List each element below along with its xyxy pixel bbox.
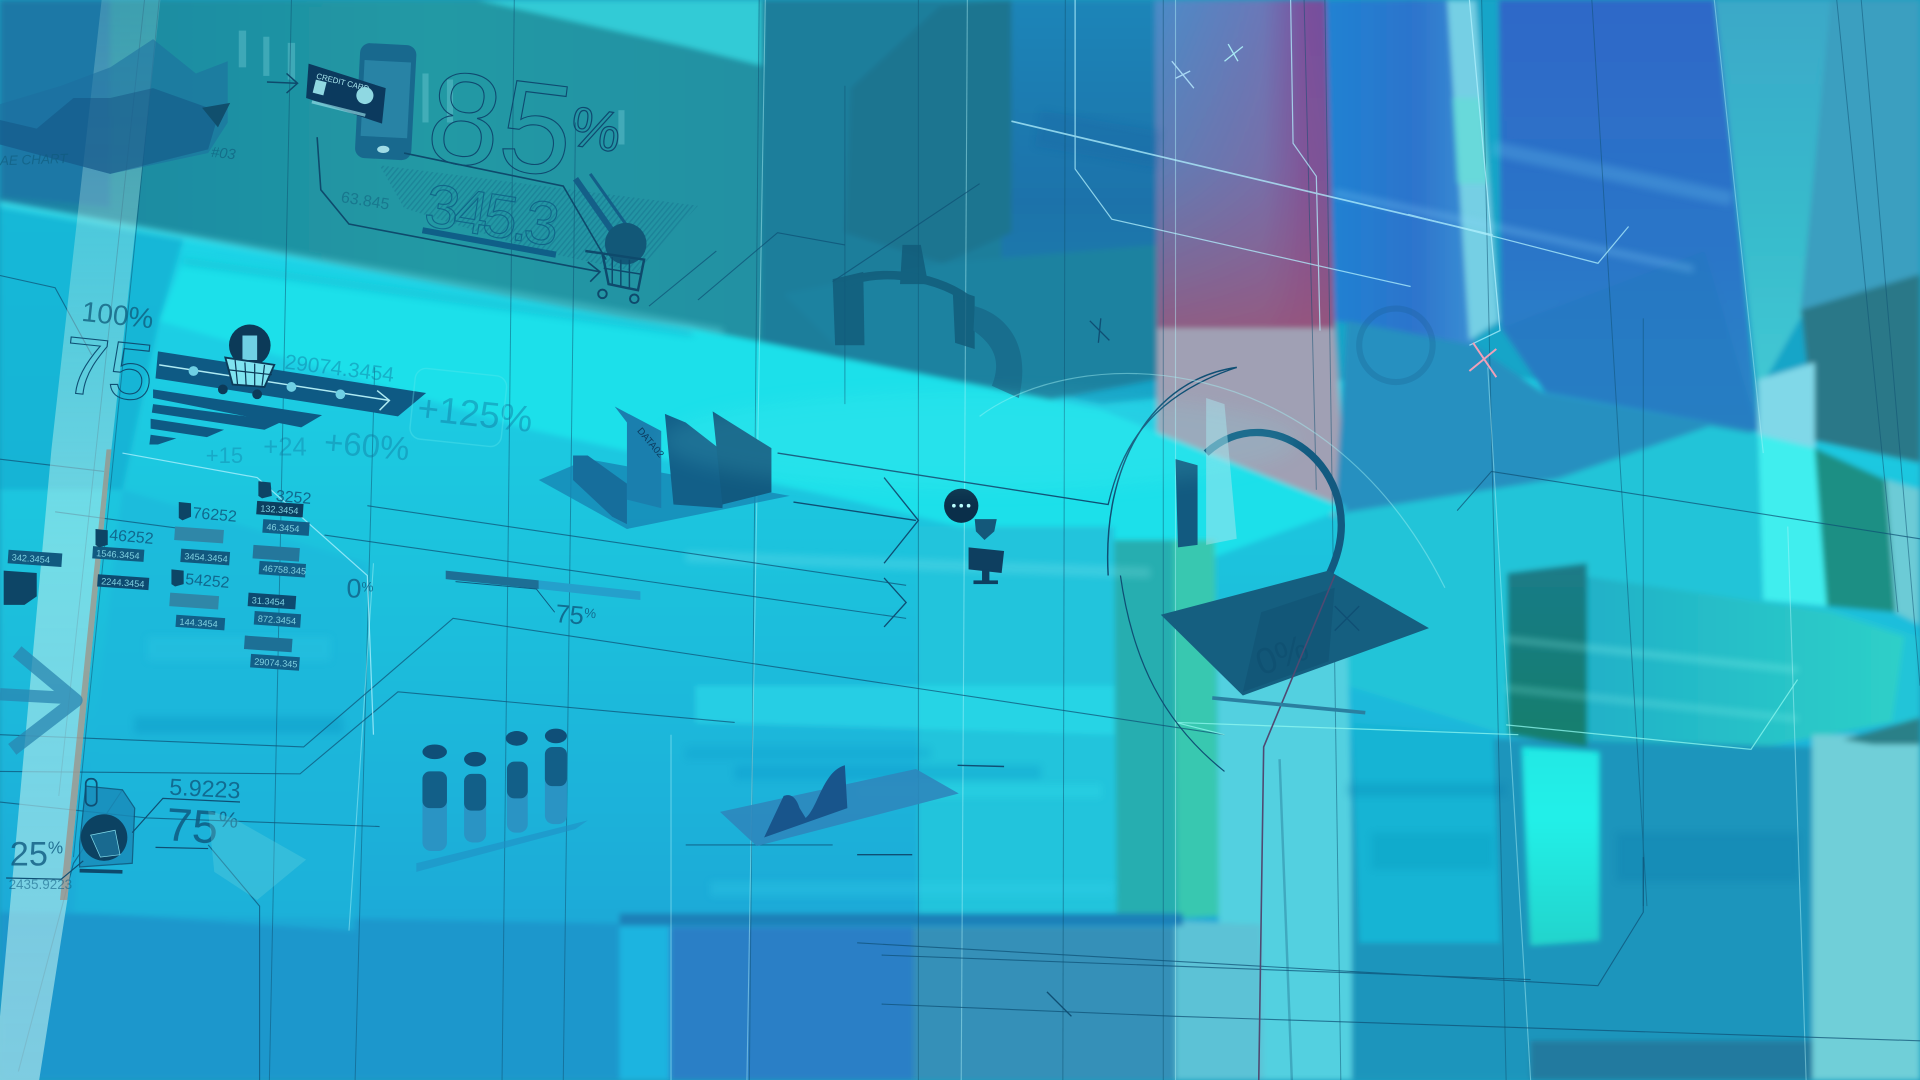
cylinder 2 [464, 752, 486, 842]
funnel chart [149, 351, 426, 444]
right pale block [1758, 362, 1815, 448]
blue band [1326, 0, 1474, 345]
dark blue band [1499, 0, 1758, 431]
stat: 85%: % [566, 94, 626, 164]
right slab [1843, 718, 1920, 744]
data list: headings [109, 488, 312, 592]
red glow [1155, 0, 1335, 331]
tag column 1: 342.3454 [11, 552, 50, 565]
data list: tags: 2244.3454 [101, 576, 145, 589]
right lower plane [1352, 735, 1812, 1080]
crosses [1047, 44, 1496, 1016]
bright central shelf [159, 255, 1347, 576]
cylinder chart [416, 729, 588, 872]
data list: headings: 76252 [192, 505, 238, 526]
centre dark box [845, 0, 1011, 263]
bottom middle blue [670, 927, 913, 1080]
label: chart caption: #03 [210, 145, 237, 163]
gauge: dark slab [1161, 571, 1429, 696]
stat: 0%: % [362, 579, 374, 594]
tag column 2 [174, 527, 224, 543]
dark green block [1507, 563, 1587, 747]
funnel labels: +24 [263, 434, 307, 462]
funnel labels: 29074.3454 [283, 351, 395, 387]
3D bar chart [539, 407, 790, 529]
bottom dark band [1531, 1041, 1812, 1080]
left lower shade [73, 490, 367, 931]
green column [1114, 540, 1178, 918]
pie stats [6, 774, 241, 892]
cylinder 4 [545, 729, 567, 824]
area chart: top left [0, 39, 230, 174]
funnel labels: +15 [206, 443, 243, 468]
bottom middle grey [913, 927, 1176, 1080]
cyan mid column [1352, 722, 1500, 943]
connector line [404, 153, 606, 260]
icon: phone [355, 43, 417, 161]
data list: tags: 872.3454 [257, 614, 296, 626]
icon: cart on funnel [218, 324, 274, 399]
data list: tags: 3454.3454 [184, 551, 228, 564]
gauge: dark slab: 0% [1250, 627, 1314, 683]
progress bar with 75% [446, 571, 640, 632]
bottom left cyan strip [620, 918, 671, 1080]
lower right column [1812, 735, 1920, 1080]
bars [573, 456, 627, 524]
dark blue lower step [1501, 251, 1758, 431]
light vertical lines [349, 0, 1806, 1080]
teal block panel [1580, 576, 1904, 784]
top right ring icon [1359, 309, 1433, 382]
cylinder 1 [422, 744, 447, 851]
connector arrow to cart [317, 137, 600, 282]
data list: headings: 3252 [275, 488, 312, 508]
left strip brown edge [60, 449, 111, 900]
icon: pie document [80, 779, 135, 872]
base [539, 459, 790, 529]
light frame lines: top right [122, 0, 1798, 749]
bright top plane [478, 0, 940, 88]
stat: 100%: 100% [80, 296, 155, 334]
funnel labels: +125% [415, 387, 535, 440]
left pale strip [0, 0, 160, 1080]
cylinder 3 [506, 731, 528, 833]
funnel labels [206, 351, 535, 468]
data list: tags: 144.3454 [179, 617, 218, 629]
pale band glow [1452, 98, 1489, 184]
stat: 75: 75 [59, 320, 158, 419]
gauge: connector lines [1212, 576, 1365, 1080]
3D bar chart: DATA02 [634, 426, 666, 460]
middle teal column [918, 527, 1117, 918]
badge ring [409, 367, 508, 448]
icon: monitor [969, 547, 1004, 584]
pie stats: 2435.9223 [9, 877, 72, 892]
label: chart caption [0, 145, 237, 168]
data list: tags: 46.3454 [266, 522, 300, 534]
pale teal band [1714, 0, 1864, 392]
pie stats: 5.9223 [169, 774, 241, 803]
centre right plane [1002, 0, 1157, 404]
bright teal block [1522, 747, 1599, 945]
data list: headings: 46252 [109, 527, 154, 548]
icon: credit card: CREDIT CARD [315, 72, 370, 93]
stat: 0%: 0 [347, 574, 362, 604]
stat: 85%: 85 [420, 43, 581, 205]
shelf plane [784, 245, 1157, 404]
blue glow under bands [1335, 321, 1758, 514]
muted purple band [1155, 0, 1335, 331]
icon: credit card [306, 64, 386, 124]
left dark plane [0, 0, 110, 208]
progress bar with 75%: 75 [554, 600, 585, 631]
pie stats: 75 [165, 798, 220, 854]
data list: tags: 46758.345 [262, 563, 306, 576]
area chart back layer [0, 39, 228, 174]
arrow: to credit card [267, 73, 298, 93]
icon: coin in cart [576, 174, 647, 303]
icon: headset shape [833, 245, 1022, 398]
pie stats: 25 [10, 836, 48, 874]
bar code strip: top background [239, 31, 624, 144]
right dark block [1801, 274, 1920, 463]
data list: tags: 29074.345 [254, 657, 298, 670]
bottom left blue [0, 912, 671, 1080]
pale lower column [1176, 921, 1264, 1080]
green block [1815, 448, 1896, 612]
pale column [1217, 612, 1357, 1080]
bright panel band [696, 686, 1114, 735]
horizontal streak texture [0, 110, 1800, 896]
data list: document icons [4, 481, 272, 605]
data list: tags [8, 501, 310, 671]
data list: headings: 54252 [185, 571, 230, 592]
underline [422, 230, 556, 255]
progress bar with 75%: % [584, 605, 597, 621]
pie stats: % [218, 807, 239, 833]
soft glow overlay [661, 392, 1298, 490]
far right pale [1886, 480, 1920, 624]
centre dark plane [762, 0, 1022, 404]
upper teal plane [0, 0, 967, 416]
pale band [1447, 0, 1499, 340]
mountain chart [720, 765, 1004, 855]
icon: chat and heart [944, 489, 997, 540]
right band [1800, 0, 1920, 316]
arrow: big chevron [0, 651, 76, 749]
label: chart caption: AE CHART [0, 151, 70, 168]
tag column 3: 132.3454 [260, 503, 299, 516]
right cyan panel [1335, 426, 1920, 735]
stat: small value: 63.845 [340, 189, 391, 214]
data list: tags: 31.3454 [251, 595, 285, 608]
data list: tags: 1546.3454 [96, 548, 140, 561]
green inner [1173, 540, 1220, 918]
funnel labels: +60% [323, 424, 411, 468]
pale data card [208, 811, 306, 900]
tag column 3 [256, 501, 304, 517]
area chart front layer [0, 88, 218, 174]
left band shade [0, 206, 184, 490]
gauge: arcs [980, 367, 1445, 771]
bright pale block [1758, 435, 1827, 606]
pink grey band [1157, 328, 1347, 520]
area marker [202, 103, 230, 127]
pie stats: % [48, 837, 63, 857]
tag column 1 [8, 550, 62, 567]
hatched area [380, 165, 698, 272]
arrows: chevrons [778, 367, 1237, 627]
low blue divider [620, 913, 1183, 926]
stat: 345.3: 345.3 [420, 171, 564, 259]
